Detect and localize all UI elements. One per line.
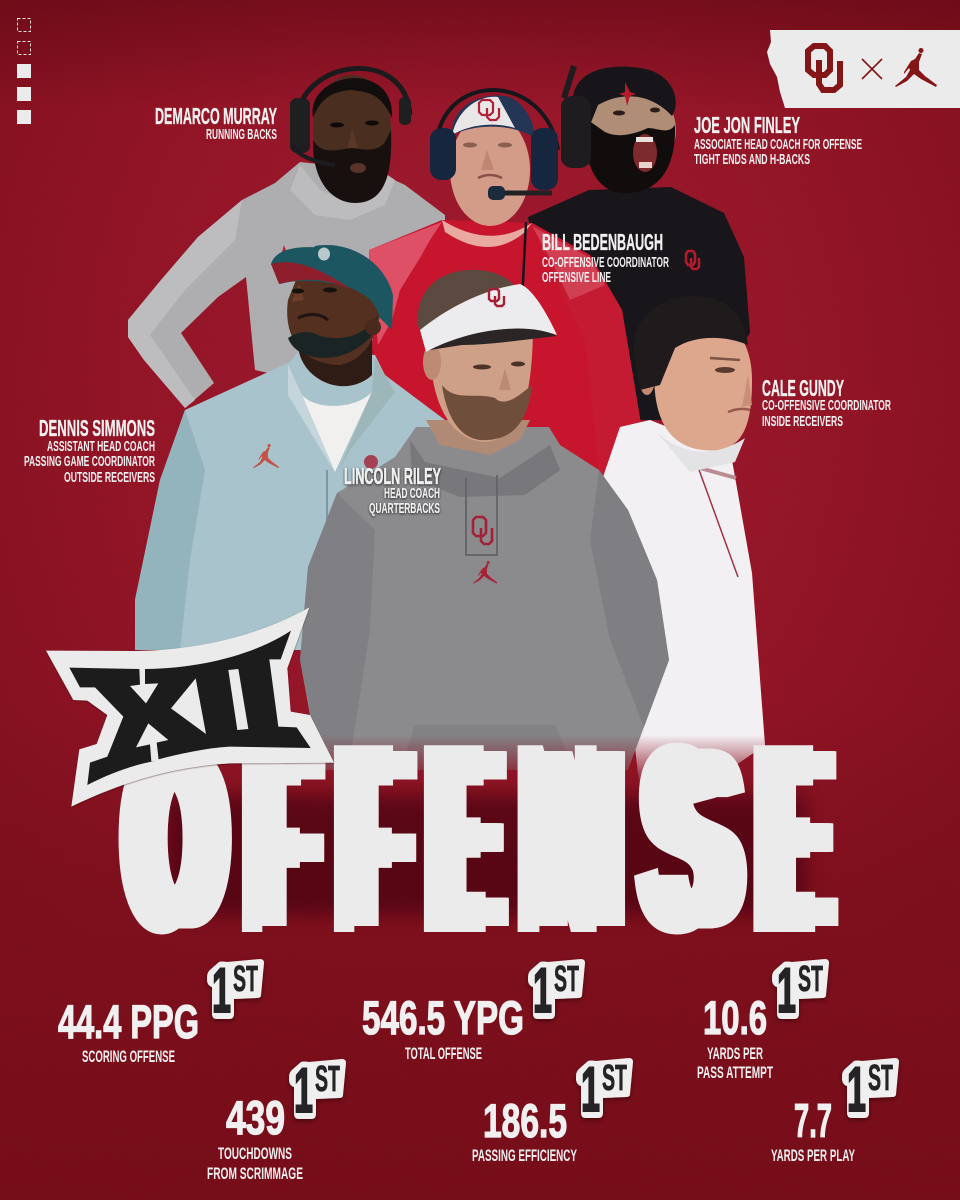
label: Bill Bedenbaugh [542,229,669,286]
coach: Cale Gundy [603,296,765,790]
label: Lincoln Riley: QUARTERBACKS [369,501,440,517]
stat: 10.6 yards per pass attempt: PASS ATTEMPT [697,1063,773,1082]
label: Joe Jon Finley: JOE JON FINLEY [694,112,800,138]
stat: 186.5 passing efficiency: PASSING EFFICIENCY [472,1146,577,1165]
stat: 7.7 yards per play [771,1055,899,1165]
label: Demarco Murray: DEMARCO MURRAY [155,103,277,129]
label: Bill Bedenbaugh: BILL BEDENBAUGH [542,229,663,255]
title: OFFENSE wordmark: S [634,696,720,980]
coach: Demarco Murray [128,68,445,408]
icon: multiply sign [862,59,882,79]
badge: 1st: 1 [777,956,796,1026]
label: Joe Jon Finley: TIGHT ENDS AND H-BACKS [694,152,810,168]
label: Lincoln Riley: HEAD COACH [384,486,440,502]
badge: 1st [842,1055,899,1125]
badge: 1st [528,956,585,1026]
label: Lincoln Riley [344,463,441,517]
stat: 44.4 PPG scoring offense [58,956,264,1066]
label: Dennis Simmons: PASSING GAME COORDINATOR [24,454,155,470]
coach: Bill Bedenbaugh [369,90,642,478]
coach: Joe Jon Finley [528,66,750,420]
coach: Lincoln Riley [300,270,669,770]
stat: 546.5 YPG total offense: 546.5 YPG [362,991,524,1044]
stat: 44.4 PPG scoring offense: 44.4 PPG [58,995,199,1048]
icon: Big XII logo [46,607,334,807]
label: Dennis Simmons: DENNIS SIMMONS [39,415,155,441]
label: Dennis Simmons: OUTSIDE RECEIVERS [64,470,155,486]
icon: OU logo [808,46,840,90]
stat: 186.5 passing efficiency [472,1055,633,1165]
stat: 546.5 YPG total offense: TOTAL OFFENSE [405,1044,482,1063]
badge: 1st: 1 [847,1055,866,1125]
label: Lincoln Riley: LINCOLN RILEY [344,463,441,489]
badge: 1st: 1 [581,1055,600,1125]
title: OFFENSE wordmark: F [237,696,302,980]
stat: 439 touchdowns from scrimmage: FROM SCRIMMAGE [207,1164,303,1183]
badge: 1st: ST [233,958,258,999]
badge: 1st [289,1056,346,1126]
badge: 1st: 1 [294,1056,313,1126]
stat: 186.5 passing efficiency: 186.5 [483,1094,567,1147]
badge: 1st: 1 [212,956,231,1026]
badge: 1st: 1 [533,956,552,1026]
icon: slide progress squares [17,18,31,124]
label: Cale Gundy [762,375,891,430]
label: Joe Jon Finley [694,112,862,168]
title: OFFENSE wordmark: N [512,696,602,980]
coaches group, fading at the foot [128,66,765,790]
badge: 1st [576,1055,633,1125]
stat: 546.5 YPG total offense [362,956,585,1063]
panel: OU x Jordan torn tab [767,30,960,108]
label: Dennis Simmons: ASSISTANT HEAD COACH [47,439,155,455]
label: Bill Bedenbaugh: OFFENSIVE LINE [542,270,611,286]
badge: 1st [207,956,264,1026]
title: OFFENSE wordmark: O [116,696,207,980]
title: OFFENSE wordmark: E [749,696,817,980]
stat: 10.6 yards per pass attempt: 10.6 [703,991,767,1044]
coach: Dennis Simmons [135,245,445,650]
stat: 44.4 PPG scoring offense: SCORING OFFENSE [82,1047,175,1066]
stat: 439 touchdowns from scrimmage: 439 [226,1091,285,1144]
icon: jumpman hoodie logo [473,561,497,584]
badge: 1st [772,956,829,1026]
label: Cale Gundy: CALE GUNDY [762,375,844,401]
badge: 1st: ST [798,958,823,999]
stat: 10.6 yards per pass attempt: YARDS PER [707,1044,763,1063]
icon: jumpman on jacket [253,444,279,468]
title: OFFENSE wordmark: F [329,696,394,980]
badge: 1st: ST [554,958,579,999]
stat: 439 touchdowns from scrimmage [207,1056,346,1183]
badge: 1st: ST [602,1057,627,1098]
stat: 7.7 yards per play: 7.7 [794,1094,832,1147]
badge: 1st: ST [315,1058,340,1099]
stat: 10.6 yards per pass attempt [697,956,829,1082]
label: Bill Bedenbaugh: CO-OFFENSIVE COORDINATOR [542,255,669,271]
label: Cale Gundy: INSIDE RECEIVERS [762,414,843,430]
title: OFFENSE wordmark [116,696,838,980]
badge: 1st: ST [868,1057,893,1098]
icon: jumpman [895,48,937,87]
stat: 7.7 yards per play: YARDS PER PLAY [771,1146,855,1165]
label: Demarco Murray: RUNNING BACKS [206,127,277,143]
stat: 439 touchdowns from scrimmage: TOUCHDOWNS [218,1144,292,1163]
title: OFFENSE wordmark: E [420,696,487,980]
label: Demarco Murray [155,103,277,143]
icon: OU hoodie logo [473,517,492,544]
label: Dennis Simmons [24,415,155,486]
shadow behind wordmark [165,795,805,915]
